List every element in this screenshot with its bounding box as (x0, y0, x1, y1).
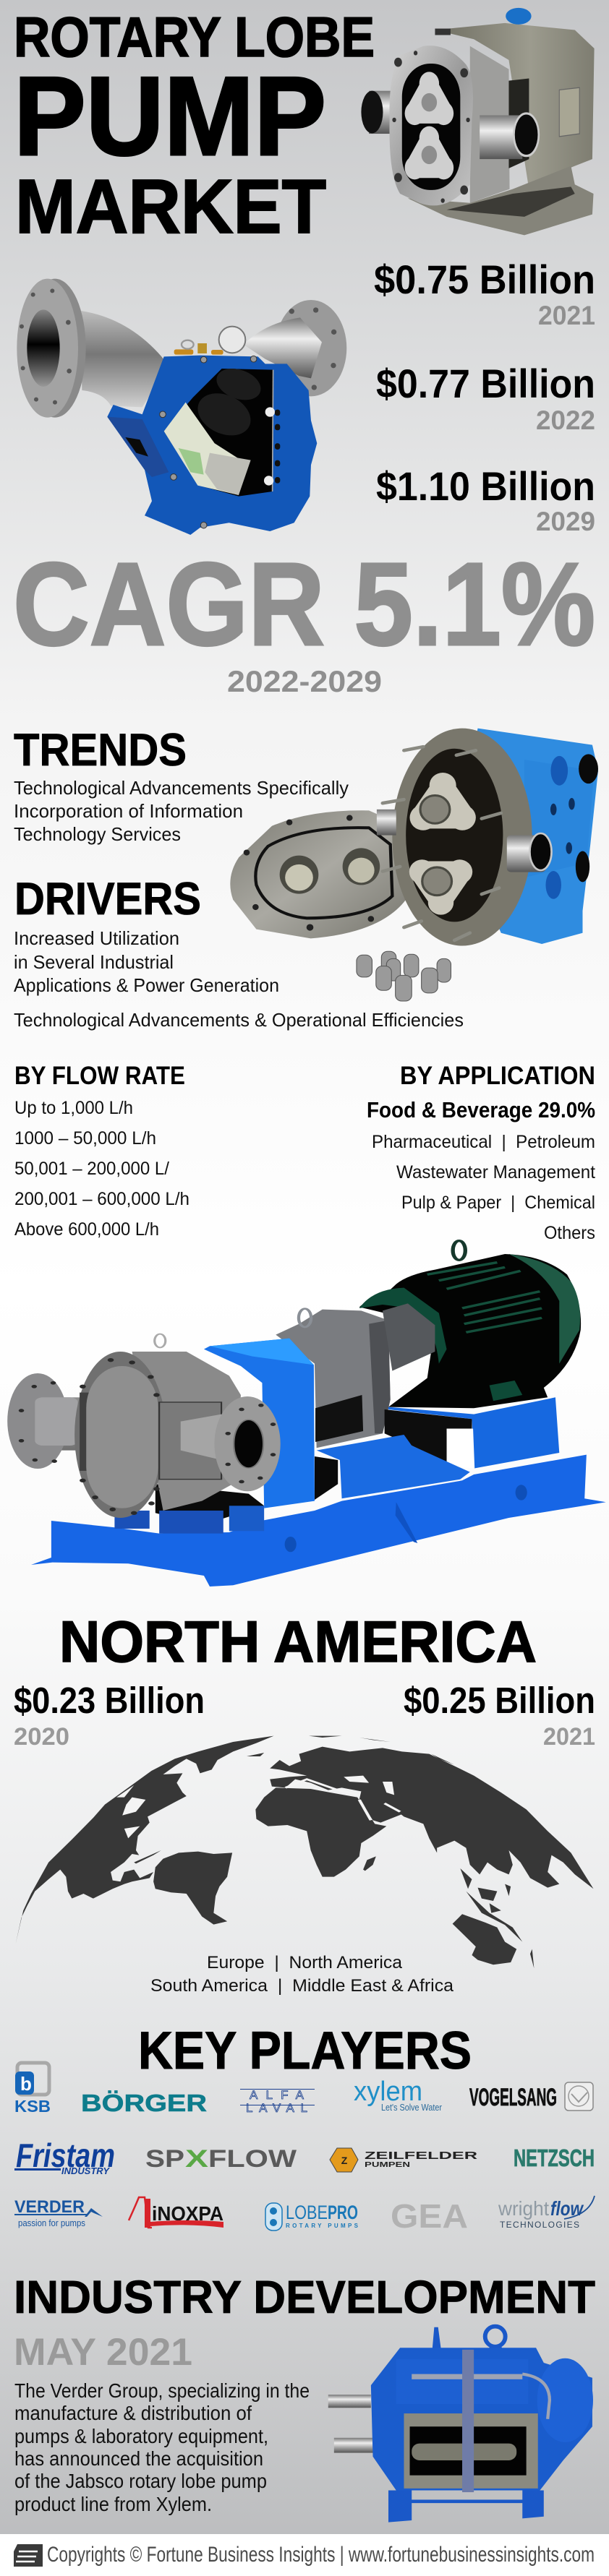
title (14, 5, 375, 249)
list: applications (372, 1132, 595, 1243)
icon: fortune business insights logo (14, 2544, 43, 2567)
panel: trends (14, 725, 349, 845)
market value 2021 (374, 257, 595, 330)
panel: key players (14, 2022, 595, 2235)
logo: SPX Flow: SP (145, 2145, 184, 2173)
logo: Fristam: INDUSTRY (61, 2165, 110, 2176)
text: development description: manufacture & distribution of (14, 2402, 252, 2424)
logo: Alfa Laval (240, 2088, 315, 2115)
market value 2021: 2021 (538, 301, 595, 330)
list: flow rates: 1000 – 50,000 L/h (14, 1128, 156, 1149)
text: development description: pumps & laboratory equipment, (14, 2425, 268, 2447)
list: flow rates: 200,001 – 600,000 L/h (14, 1189, 189, 1209)
text: trends body: Technology Services (14, 823, 181, 845)
CAGR period: 2022-2029 (227, 664, 382, 698)
logo: SPX Flow: FLOW (208, 2145, 297, 2173)
heading: industry development: INDUSTRY DEVELOPMENT (14, 2271, 595, 2323)
list: flow rates: 50,001 – 200,000 L/ (14, 1159, 169, 1179)
logo: Lobepro: PRO (328, 2202, 358, 2223)
logo: KSB: b (20, 2073, 32, 2095)
logo: Wright Flow (498, 2196, 595, 2230)
logo: Verder: VERDER (14, 2197, 85, 2217)
heading: by application: BY APPLICATION (400, 1062, 595, 1090)
regional value 2021: 2021 (543, 1723, 595, 1751)
panel: market size values (374, 257, 595, 536)
heading: drivers: DRIVERS (14, 874, 201, 924)
panel: by application (367, 1062, 595, 1243)
heading: key players: KEY PLAYERS (138, 2022, 472, 2080)
logo: Wright Flow: flow (550, 2197, 584, 2220)
logo: Alfa Laval: LAVAL (246, 2101, 307, 2115)
logo: Wright Flow: TECHNOLOGIES (500, 2220, 579, 2230)
logo: Borger: BÖRGER (81, 2090, 207, 2116)
text: drivers body (14, 927, 464, 1031)
date: may 2021: MAY 2021 (14, 2331, 192, 2374)
panel: north america (14, 1610, 595, 1996)
text: drivers body: Applications & Power Generation (14, 974, 279, 996)
list: flow rates (14, 1098, 189, 1240)
title: PUMP (14, 53, 326, 179)
text: drivers body: Technological Advancements & Operational Efficiencies (14, 1009, 464, 1031)
market value 2022: 2022 (536, 405, 595, 435)
logo: Xylem: Let's Solve Water (381, 2102, 443, 2113)
logo: Verder: passion for pumps (18, 2217, 85, 2228)
regional value 2020: 2020 (14, 1723, 69, 1751)
text: development description: has announced the acquisition (14, 2447, 263, 2470)
logo: Zeilfelder: PUMPEN (365, 2161, 410, 2169)
text: trends body: Incorporation of Information (14, 800, 243, 822)
logo: Fristam: Fristam (16, 2137, 115, 2174)
text: development description: product line from Xylem. (14, 2493, 212, 2515)
footer (0, 2534, 609, 2576)
regional value 2020 (14, 1680, 205, 1751)
logo: Verder (14, 2197, 103, 2228)
list: applications: Others (544, 1223, 595, 1243)
logo: Zeilfelder: ZEILFELDER (365, 2150, 477, 2162)
market value 2022: $0.77 Billion (376, 361, 595, 406)
logo: Lobepro: ROTARY PUMPS (286, 2223, 359, 2229)
logo: GEA: GEA (391, 2197, 468, 2235)
text: drivers body: Increased Utilization (14, 927, 179, 949)
logo: Inoxpa: iNOXPA (152, 2202, 223, 2225)
world map (15, 1736, 594, 1968)
text: trends body: Technological Advancements Specifically (14, 777, 349, 799)
text: regions list (150, 1953, 454, 1996)
text: drivers body: in Several Industrial (14, 951, 174, 973)
icon: open rotary lobe pump with parts (230, 729, 598, 1001)
market value 2022 (376, 361, 595, 435)
logo: KSB: KSB (14, 2097, 51, 2116)
heading: north america: NORTH AMERICA (59, 1610, 537, 1675)
list: flow rates: Up to 1,000 L/h (14, 1098, 133, 1118)
icon: stainless rotary lobe pump (361, 8, 595, 235)
market value 2029: 2029 (536, 507, 595, 536)
text: trends body (14, 777, 349, 845)
icon: blue pump with curved pipes (17, 279, 346, 535)
list: applications: Wastewater Management (396, 1162, 595, 1182)
logo: SPX Flow: X (185, 2145, 208, 2173)
text: development description: The Verder Group, specializing in the (14, 2379, 310, 2402)
title: ROTARY LOBE (14, 5, 375, 69)
panel: by flow rate (14, 1062, 189, 1240)
logo: KSB (14, 2063, 51, 2116)
list: flow rates: Above 600,000 L/h (14, 1219, 159, 1240)
heading: trends: TRENDS (14, 725, 187, 776)
regional value 2020: $0.23 Billion (14, 1680, 205, 1721)
text: development description (14, 2379, 310, 2515)
logo: Lobepro (265, 2202, 359, 2231)
logo: SPX Flow (145, 2145, 297, 2173)
market value 2029: $1.10 Billion (376, 463, 595, 509)
icon: blue lobe pump with window (328, 2327, 593, 2523)
panel: header (14, 5, 595, 535)
market value 2021: $0.75 Billion (374, 257, 595, 302)
icon: motor-driven pump on blue skid (7, 1241, 606, 1587)
panel: drivers (14, 874, 464, 1031)
list: applications: Pharmaceutical | Petroleum (372, 1132, 595, 1152)
logo: Lobepro: LOBE (286, 2202, 328, 2223)
list: applications: Pulp & Paper | Chemical (401, 1193, 595, 1213)
logo: Xylem (354, 2077, 443, 2113)
text: regions list: Europe | North America (207, 1953, 403, 1972)
logo: Xylem: xylem (354, 2077, 422, 2107)
text: regions list: South America | Middle East & Africa (150, 1976, 454, 1996)
heading: by flow rate: BY FLOW RATE (14, 1062, 185, 1090)
text: development description: of the Jabsco rotary lobe pump (14, 2470, 267, 2492)
logo: Wright Flow: wright (498, 2197, 549, 2220)
logo: Zeilfelder (330, 2148, 477, 2172)
panel: CAGR (13, 538, 595, 698)
logo: Zeilfelder: Z (341, 2155, 348, 2166)
title: MARKET (15, 164, 326, 249)
logo: Alfa Laval: ALFA (250, 2088, 304, 2102)
market value 2029 (376, 463, 595, 536)
logo: Inoxpa (129, 2197, 223, 2228)
regional value 2021 (404, 1680, 595, 1751)
panel: industry development (14, 2271, 595, 2523)
